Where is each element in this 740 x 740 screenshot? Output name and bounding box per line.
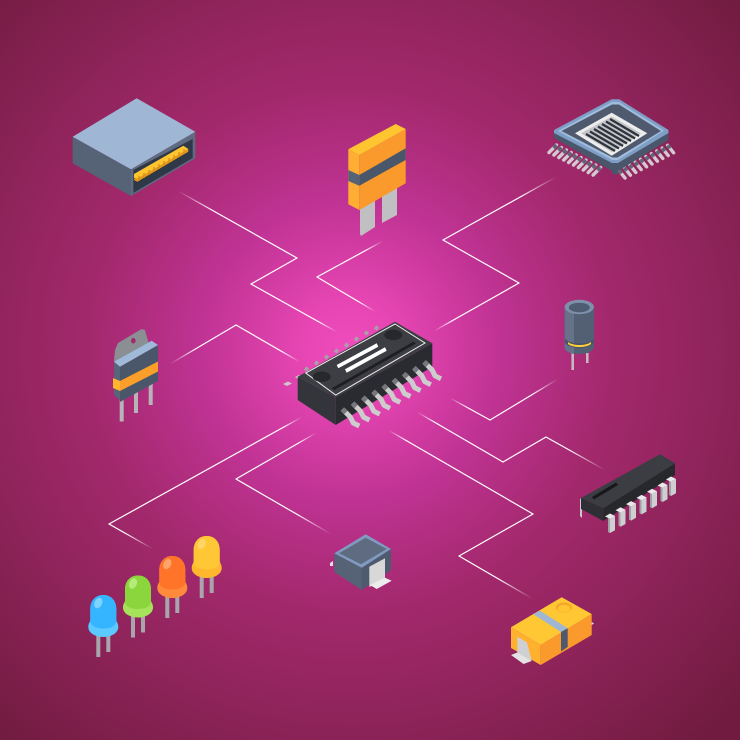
icon: power transistor <box>113 329 158 422</box>
tantalum band <box>533 611 568 632</box>
icon: orange LED <box>157 556 187 618</box>
line: DIP chip to central chip <box>417 412 605 470</box>
icon: inductor block <box>330 534 392 590</box>
transistor tab <box>114 329 150 364</box>
central chip white border <box>306 324 425 395</box>
icon: slot connector module <box>73 98 195 196</box>
line: inductor to central chip <box>236 433 331 534</box>
central chip back pins <box>305 327 378 370</box>
line: LEDs to central chip <box>109 417 302 549</box>
icon: DIP chip <box>580 454 676 533</box>
line: transistor to central chip <box>170 325 300 364</box>
central chip dots <box>313 372 331 382</box>
icon: green LED <box>123 576 153 638</box>
central chip front pins <box>342 362 441 426</box>
icon: yellow tantalum component <box>511 597 594 665</box>
transistor legs <box>122 380 151 422</box>
icon: blue LED <box>88 595 118 657</box>
processor right pins <box>619 145 674 178</box>
processor left pins <box>549 145 601 175</box>
DIP chip pins <box>605 476 676 533</box>
capacitor legs <box>573 353 587 370</box>
line: fuse to central chip <box>317 241 383 312</box>
icon: LED set <box>88 536 222 657</box>
connector lines <box>109 177 605 599</box>
icon: square processor chip <box>549 99 674 178</box>
icon: electrolytic capacitor <box>565 300 594 370</box>
line: tantalum component to central chip <box>388 430 533 599</box>
tantalum pads <box>517 637 532 661</box>
icon: yellow LED <box>192 536 222 598</box>
line: processor to central chip <box>434 177 556 331</box>
central chip groove <box>332 342 416 390</box>
central chip <box>283 322 441 426</box>
inductor pad <box>369 558 385 587</box>
icon: orange fuse <box>348 124 406 236</box>
line: slot module to central chip <box>178 191 337 332</box>
central chip white stripes <box>337 343 378 368</box>
line: capacitor to central chip <box>450 379 558 420</box>
